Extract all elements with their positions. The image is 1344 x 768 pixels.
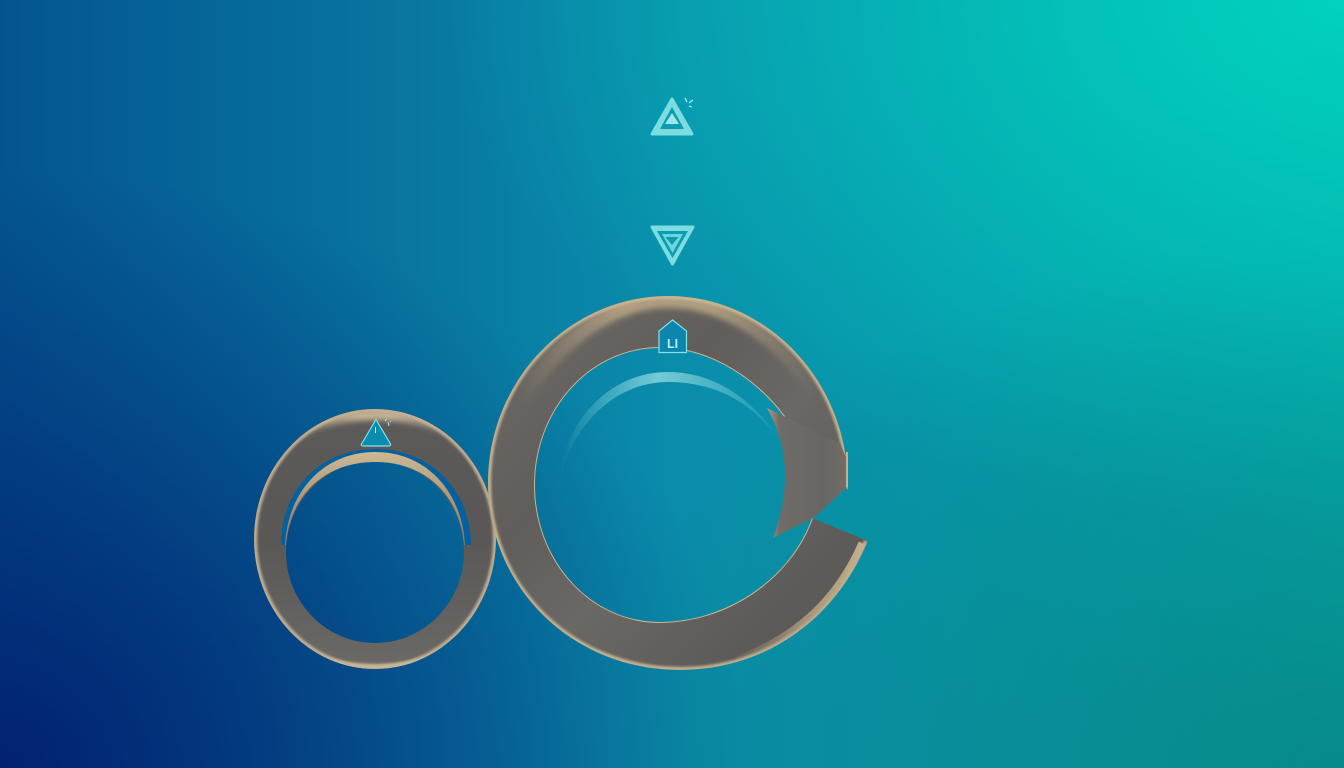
large ring bbox=[488, 296, 868, 670]
small ring inner crescent gap bbox=[281, 449, 471, 545]
small ring outer band bbox=[254, 409, 496, 669]
icon: down triangle bbox=[652, 227, 693, 264]
large ring rim highlights bbox=[489, 297, 866, 669]
house label: LI bbox=[667, 337, 678, 351]
icon: up triangle bbox=[652, 98, 693, 134]
large ring band bbox=[488, 296, 868, 670]
ring diagram bbox=[254, 97, 868, 670]
icon: house bbox=[659, 320, 686, 352]
small ring inner gold arc bbox=[285, 452, 465, 545]
folded ribbon piece bbox=[767, 408, 847, 538]
inner glow arc bbox=[560, 372, 778, 480]
small ring bbox=[254, 409, 496, 669]
small ring rim highlights bbox=[255, 410, 495, 668]
icon: alert triangle bbox=[361, 419, 391, 446]
fold rim edge bbox=[846, 452, 848, 487]
